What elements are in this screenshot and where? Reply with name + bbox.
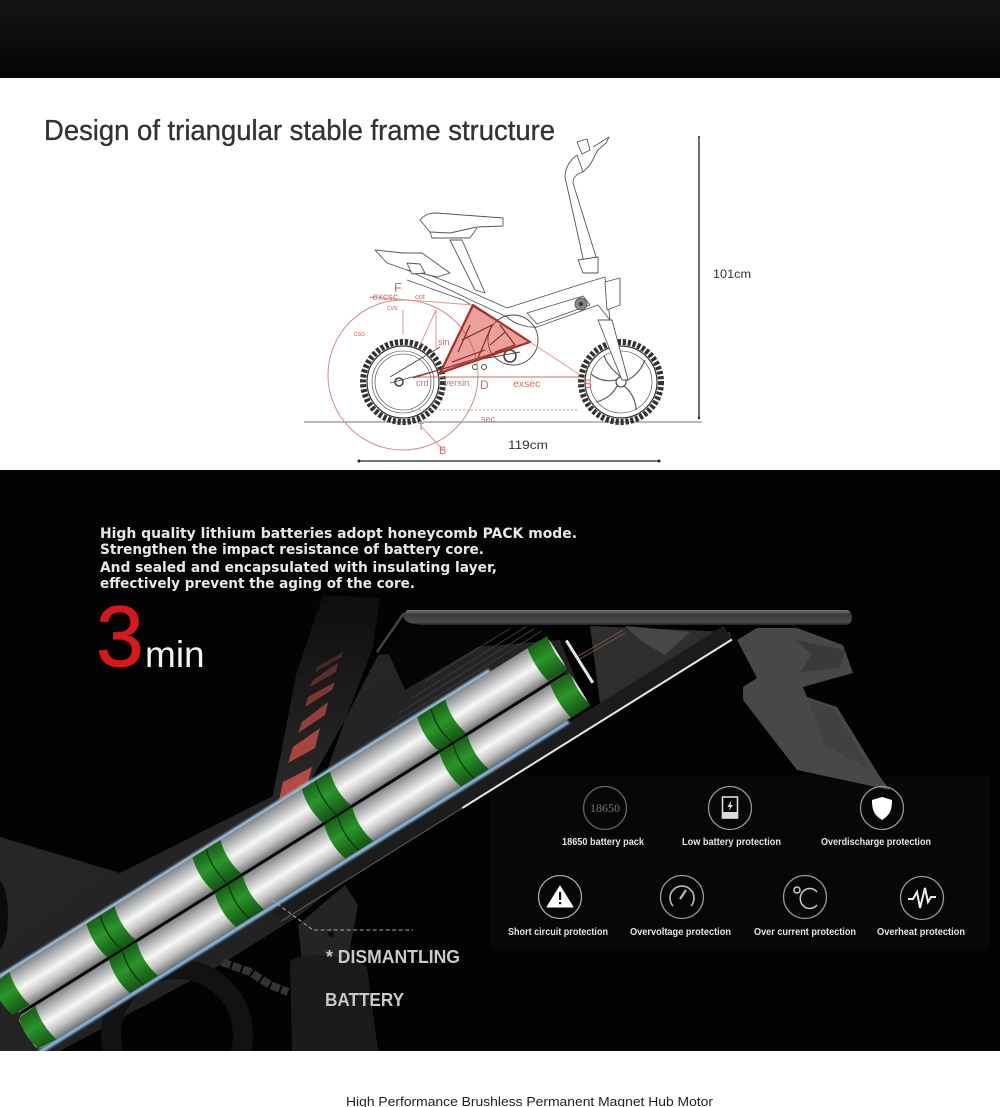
stem clamp xyxy=(578,257,598,273)
label: low battery protection: Low battery protection xyxy=(682,836,781,848)
battery description text: effectively prevent the aging of the core. xyxy=(100,576,415,592)
bicycle diagram xyxy=(304,137,702,457)
label: overdischarge protection: Overdischarge protection xyxy=(821,836,931,848)
trigonometry labels: T xyxy=(418,422,424,433)
rear wheel disc xyxy=(101,960,253,1051)
callout: dismantling battery: * DISMANTLING xyxy=(326,947,460,967)
casing grey edge xyxy=(281,808,462,921)
battery description text: High quality lithium batteries adopt honeycomb PACK mode. xyxy=(100,526,577,542)
rear rack bracket xyxy=(737,628,890,790)
red stable triangle xyxy=(413,305,530,378)
3 min figure: min xyxy=(145,634,205,675)
rear rack xyxy=(375,250,450,277)
trigonometry labels: cso xyxy=(354,331,365,338)
frame lines above tube xyxy=(384,626,542,730)
icon: overvoltage gauge xyxy=(660,876,704,918)
upper blue glow xyxy=(0,669,490,982)
bracket highlight xyxy=(625,626,690,655)
motor mount xyxy=(290,885,378,1051)
lower cell xyxy=(17,672,590,1051)
panel: battery xyxy=(0,470,1000,1101)
callout: dismantling battery: BATTERY xyxy=(325,990,404,1010)
icon: over current celsius xyxy=(784,876,826,918)
lower casing xyxy=(336,626,732,886)
height label: 101cm xyxy=(713,267,751,281)
upper cell xyxy=(0,636,568,1015)
trigonometry labels xyxy=(354,280,592,457)
casing white edge xyxy=(462,639,732,808)
icon: short circuit warning xyxy=(538,876,582,918)
icon: overheat pulse xyxy=(900,876,944,920)
bike frame behind battery xyxy=(0,595,580,1051)
folding hinge xyxy=(575,298,587,310)
trigonometry labels: S xyxy=(584,377,592,391)
label: overheat protection: Overheat protection xyxy=(877,926,965,938)
ground line xyxy=(304,421,702,423)
label: over current protection: Over current protection xyxy=(754,926,856,938)
front box xyxy=(605,278,620,310)
end plate xyxy=(566,640,593,683)
wrap ridge lines xyxy=(98,709,474,986)
callout: dismantling battery xyxy=(326,950,459,1006)
battery description text: Strengthen the impact resistance of battery core. xyxy=(100,542,484,558)
width dimension arrow xyxy=(358,460,660,462)
rack support xyxy=(590,626,732,703)
3 min figure: 3 xyxy=(96,589,144,685)
trigonometry circle overlay xyxy=(328,297,580,450)
body hole xyxy=(0,880,8,950)
saddle xyxy=(420,213,503,233)
rear wheel xyxy=(363,342,443,422)
wire detail xyxy=(577,630,625,660)
title: Design of triangular stable frame structure xyxy=(44,115,555,147)
trigonometry labels: cvs xyxy=(387,305,398,312)
battery description text xyxy=(100,526,577,592)
brake lever xyxy=(577,137,609,172)
icon: low battery xyxy=(708,786,752,830)
panel background xyxy=(0,470,1000,1051)
width label: 119cm xyxy=(508,438,548,452)
front wheel xyxy=(581,342,661,422)
battery pack xyxy=(0,626,732,1051)
battery description text: And sealed and encapsulated with insulating layer, xyxy=(100,560,497,576)
rack top bar xyxy=(403,610,852,625)
trigonometry labels: cot xyxy=(415,292,426,301)
trigonometry labels: crd xyxy=(416,378,429,388)
lower blue glow xyxy=(38,720,570,1054)
trigonometry labels: versin xyxy=(444,378,469,389)
label: overvoltage protection: Overvoltage protection xyxy=(630,926,731,938)
trigonometry labels: B xyxy=(439,445,446,457)
trigonometry labels: D xyxy=(480,378,489,392)
icon: overdischarge shield xyxy=(860,786,904,830)
label: short circuit protection: Short circuit protection xyxy=(508,926,608,938)
icon area shading xyxy=(490,775,990,950)
crank and chain guard xyxy=(390,315,538,386)
trigonometry labels: sin xyxy=(438,337,450,347)
chain xyxy=(222,962,288,992)
frame body xyxy=(0,640,580,1051)
trigonometry labels: exsec xyxy=(513,378,540,390)
icon: 18650 battery pack xyxy=(584,786,626,830)
handlebar stem xyxy=(565,155,597,267)
trigonometry labels: sec xyxy=(481,414,496,424)
bicycle frame outline xyxy=(375,137,628,380)
trigonometry labels: F xyxy=(394,280,402,295)
green wraps xyxy=(0,636,590,1054)
trigonometry labels: ·excsc xyxy=(369,292,398,303)
seat post xyxy=(450,240,485,293)
seat tube xyxy=(272,595,380,800)
top dark band xyxy=(0,0,1000,78)
height dimension arrow xyxy=(698,136,700,419)
3 min figure xyxy=(98,605,202,668)
main frame lines xyxy=(403,268,610,327)
fork xyxy=(598,320,628,380)
gap line xyxy=(20,671,566,1015)
icon: 18650 battery pack: 18650 xyxy=(590,801,620,815)
label: 18650 battery pack: 18650 battery pack xyxy=(562,836,644,848)
battery slot xyxy=(527,296,590,324)
callout leader line xyxy=(272,900,413,930)
red reflector stripes xyxy=(279,652,343,800)
frame window xyxy=(389,646,478,690)
